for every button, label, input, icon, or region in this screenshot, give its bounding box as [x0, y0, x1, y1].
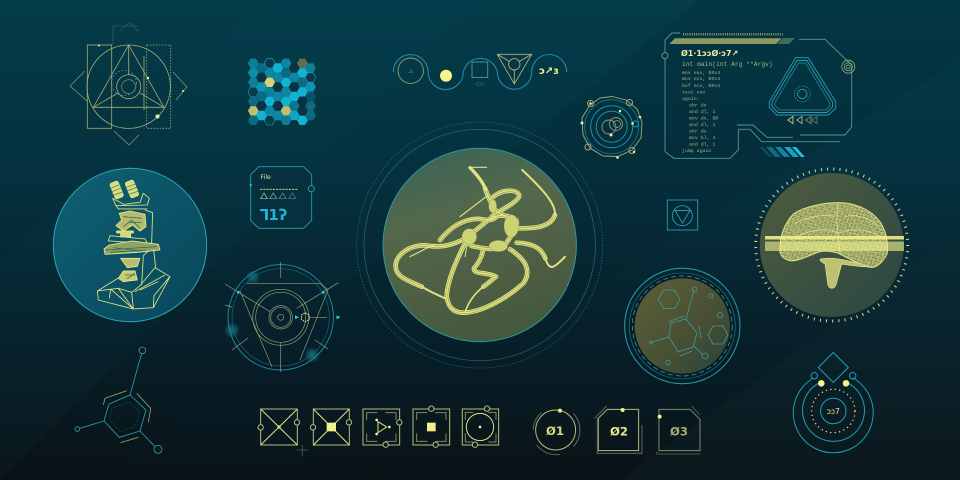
triangle icon — [497, 54, 532, 84]
bottom icon row — [258, 406, 700, 456]
sphere — [53, 168, 207, 322]
code text: shr dx — [689, 102, 707, 108]
code text: bsf ecx, $0x4 — [682, 83, 720, 89]
code text: and dl, 1 — [689, 142, 715, 148]
code text: again: — [682, 96, 700, 102]
square triangle icon — [667, 200, 698, 230]
code text: mov eax, $0x4 — [682, 70, 720, 76]
panel outline — [665, 33, 852, 158]
icon 7: Ø2 — [610, 425, 628, 439]
reactor emblem: ɔɔ7 — [827, 407, 840, 416]
orbit diagram — [580, 96, 642, 159]
central specimen sphere — [357, 122, 603, 368]
code text: shr dx — [689, 128, 707, 134]
sphere body — [383, 148, 576, 342]
file panel — [250, 167, 314, 228]
square icon: cɔɔ — [476, 82, 485, 88]
code text: and dl, 1 — [689, 122, 715, 128]
code text: jump again — [682, 148, 711, 154]
wave strip with icons — [393, 54, 567, 90]
wave line — [393, 55, 567, 90]
icon 8: Ø3 — [670, 425, 688, 439]
icon 1 — [258, 409, 308, 456]
square icon — [472, 62, 488, 88]
brain sphere — [756, 169, 908, 321]
sphere — [760, 173, 904, 317]
petri dish molecule — [625, 268, 740, 384]
code text: int main(int Arg **Argv) — [682, 61, 773, 68]
microscope — [97, 180, 170, 309]
organism — [396, 167, 565, 313]
arrow triangles — [788, 116, 817, 124]
corner target — [842, 60, 855, 73]
code panel — [662, 33, 855, 158]
microscope sphere — [53, 168, 207, 322]
tick ring — [756, 169, 908, 321]
code text: mov bl, 4 — [689, 135, 715, 141]
outer rings — [357, 122, 603, 368]
molecule bottom left — [75, 347, 162, 453]
icon 4 — [413, 406, 450, 447]
sacred geometry diagram — [70, 23, 187, 145]
left node — [662, 53, 668, 59]
icon 3 — [363, 409, 402, 447]
code text — [682, 61, 773, 154]
icon 7 — [595, 406, 642, 453]
code text: test eax — [682, 90, 706, 96]
triangular frame — [769, 58, 836, 115]
yellow dot — [440, 70, 452, 82]
ring icon: ⅃ɿ — [408, 69, 414, 75]
code text: mov ecx, $0x4 — [682, 76, 720, 82]
stripes — [760, 147, 805, 157]
icon 6: Ø1 — [546, 424, 564, 438]
scan band — [765, 236, 904, 251]
hexagon grid — [248, 59, 316, 130]
file code: ⅂1ʔ — [260, 206, 287, 224]
icon 8 — [657, 406, 700, 454]
code text: and dl, 1 — [689, 109, 715, 115]
icon 5 — [462, 406, 499, 447]
icon 6 — [533, 409, 580, 455]
code text: mov dx, $0 — [689, 116, 718, 122]
ring icon — [398, 58, 423, 83]
panel title: Ø1·1ɔɔØ·ɔ7↗ — [681, 48, 738, 58]
glyph text: ɔ↗ɜ — [539, 66, 559, 77]
panel nodes — [250, 184, 314, 192]
brain — [780, 203, 887, 288]
icon 2 — [310, 409, 352, 445]
triangle row — [260, 193, 296, 198]
radar — [225, 262, 340, 372]
reactor emblem — [793, 352, 873, 453]
header bar — [669, 34, 795, 44]
dashed line — [260, 188, 298, 190]
file label: File — [260, 174, 271, 181]
